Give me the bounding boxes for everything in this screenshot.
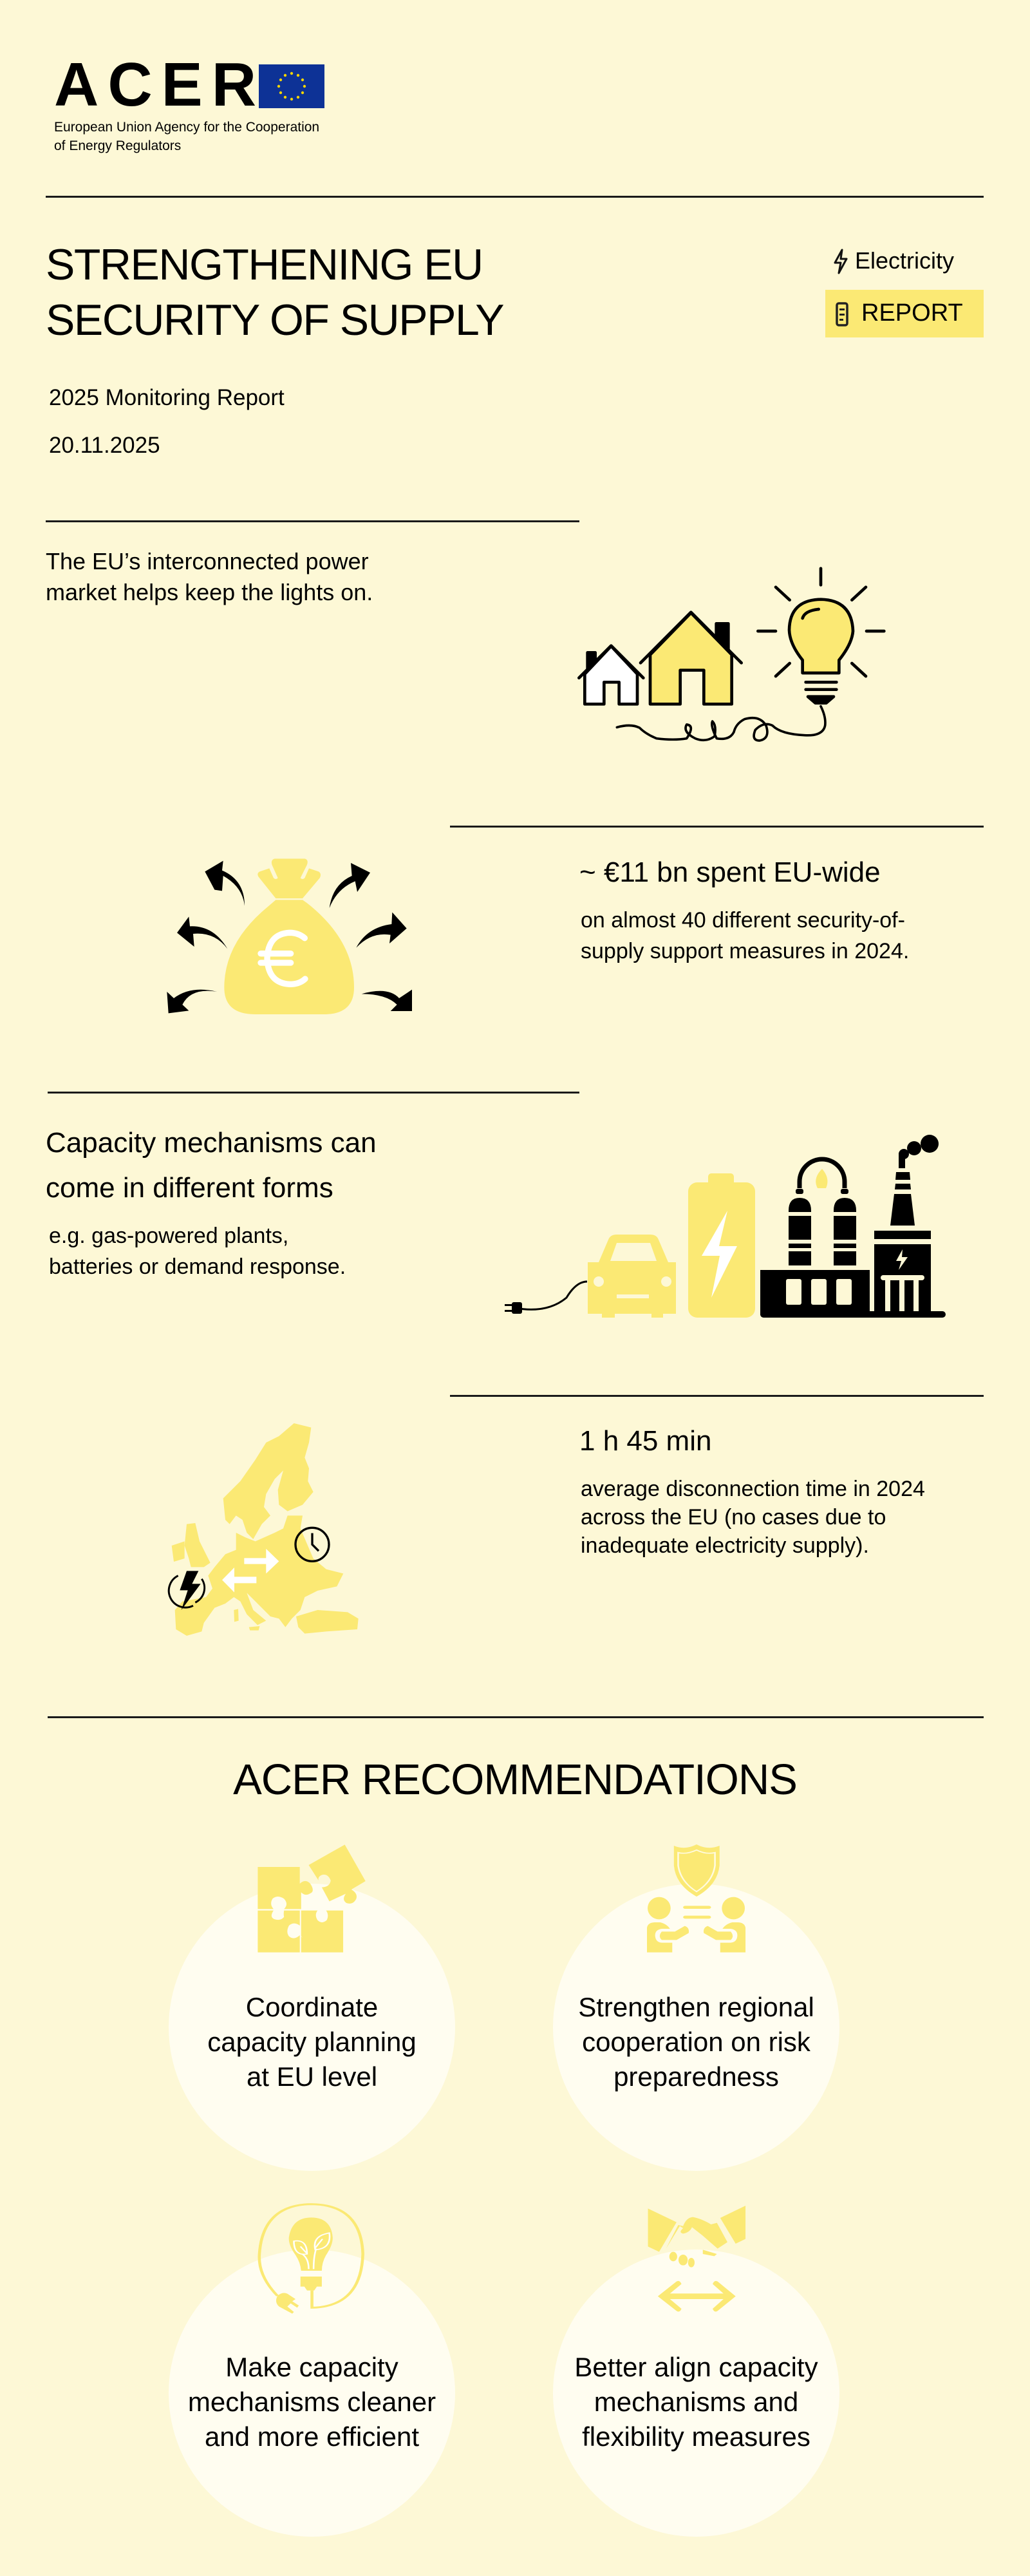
text: interconnected market (46, 548, 373, 605)
icon: money bag with arrows (167, 858, 412, 1014)
stat description (581, 908, 909, 963)
circle: coordinate planning: Coordinate (246, 1992, 378, 2022)
circle: coordinate planning (169, 1884, 455, 2171)
bulb with leaves (289, 2217, 333, 2271)
circle: regional cooperation: Strengthen regional (578, 1992, 814, 2022)
heading: come in different forms (46, 1172, 333, 1204)
description: batteries or demand response. (49, 1255, 346, 1279)
date: 20.11.2025 (49, 433, 160, 458)
stat description: supply support measures in 2024. (581, 939, 909, 963)
title: SECURITY OF SUPPLY (46, 296, 503, 345)
people (674, 1844, 720, 1897)
logo wordmark: ACER (54, 50, 265, 119)
circle: regional cooperation (553, 1884, 839, 2171)
plug and cord (515, 1282, 587, 1309)
description (49, 1224, 346, 1279)
map of Europe with icons (167, 1423, 359, 1636)
subtitle: 2025 Monitoring Report: 2025 Monitoring Report (49, 385, 285, 410)
icon: EU flag (259, 64, 324, 108)
circle: cleaner mechanisms (169, 2249, 455, 2537)
icon: document (836, 302, 848, 327)
logo subtitle (54, 120, 319, 153)
car (588, 1235, 676, 1318)
handshake (648, 2208, 677, 2252)
text: €11 bn spent (579, 857, 909, 963)
icon: plug, car, battery, power plant (505, 1135, 946, 1318)
circle: cleaner mechanisms: and more efficient (205, 2421, 419, 2452)
circle: coordinate planning: at EU level (247, 2061, 377, 2092)
icon: lightning (834, 249, 848, 274)
circle: align flexibility: mechanisms and (594, 2387, 798, 2417)
text: capacity mechanisms (46, 1127, 377, 1279)
stat description: across the EU (no cases due to (581, 1505, 886, 1530)
circle: regional cooperation: preparedness (613, 2061, 779, 2092)
power plant (760, 1135, 946, 1318)
recommendation circles (169, 1884, 839, 2537)
tag: REPORT: REPORT (861, 299, 963, 327)
stat heading: ~ €11 bn spent EU-wide (579, 857, 881, 888)
heading (46, 1127, 377, 1204)
battery (708, 1173, 734, 1186)
circle: regional cooperation: cooperation on risk (582, 2027, 810, 2057)
text: interconnected market: market helps keep the lights on. (46, 579, 373, 605)
logo subtitle: of Energy Regulators (54, 138, 181, 153)
circle: align flexibility: flexibility measures (582, 2421, 810, 2452)
heading: ACER recommendations: ACER RECOMMENDATIONS (233, 1756, 797, 1804)
stat description (581, 1477, 925, 1558)
stat heading: 1 h 45 min (579, 1425, 711, 1457)
description: e.g. gas-powered plants, (49, 1224, 288, 1248)
logo subtitle: European Union Agency for the Cooperation (54, 120, 319, 135)
stat description: on almost 40 different security-of- (581, 908, 905, 933)
circle: coordinate planning: capacity planning (207, 2027, 417, 2057)
icons: puzzle and people (258, 1844, 745, 1953)
logo: ACER (54, 50, 324, 153)
icons: bulb with plug and handshake (258, 2203, 745, 2314)
text: disconnection time (579, 1425, 925, 1558)
stat description: inadequate electricity supply). (581, 1533, 869, 1558)
circle: cleaner mechanisms: Make capacity (225, 2352, 398, 2382)
circle: cleaner mechanisms: mechanisms cleaner (188, 2387, 436, 2417)
tag: Electricity: Electricity (855, 247, 954, 274)
stat description: average disconnection time in 2024 (581, 1477, 925, 1501)
text: interconnected market: The EU’s interconnected power (46, 548, 369, 574)
title: STRENGTHENING EU (46, 240, 483, 289)
double arrow (658, 2281, 736, 2311)
circle: align flexibility (553, 2249, 839, 2537)
puzzle (258, 1867, 313, 1909)
icon: houses and light bulb (577, 567, 886, 742)
circle: align flexibility: Better align capacity (574, 2352, 818, 2382)
title (46, 240, 503, 345)
heading: Capacity mechanisms can (46, 1127, 377, 1159)
tag: REPORT (825, 290, 984, 337)
